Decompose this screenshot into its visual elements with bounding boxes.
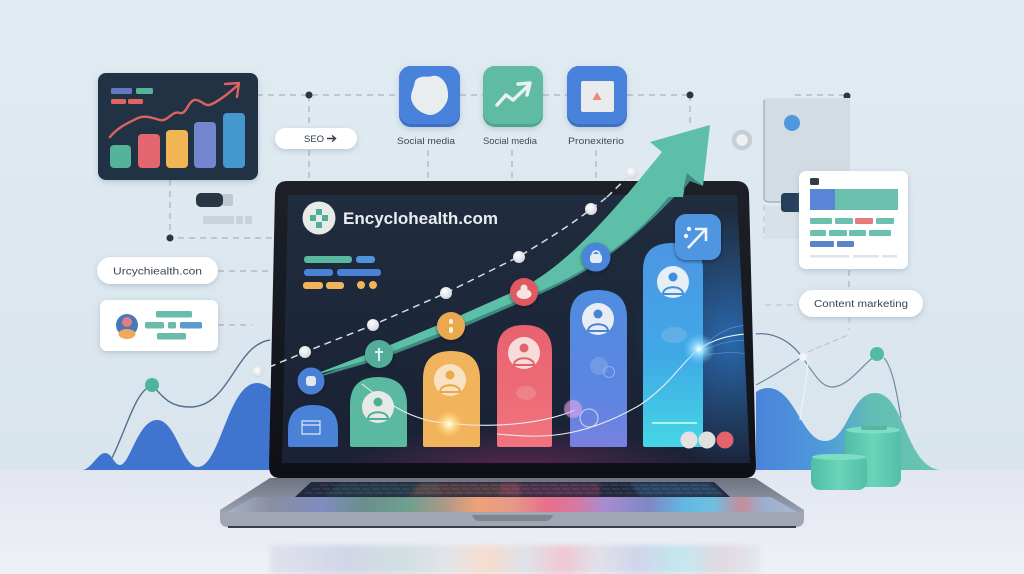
- white node: [799, 353, 807, 361]
- grey back panel: [764, 98, 850, 239]
- floor reflection: [270, 545, 760, 574]
- white data card: [799, 171, 908, 269]
- ring ornament: [734, 132, 750, 148]
- screen legend bars: [303, 256, 381, 289]
- bar: cyan: [643, 243, 703, 447]
- arrow overlap outside screen: [625, 125, 710, 197]
- label: social media 1: Social media: [397, 136, 456, 147]
- teal node: [870, 347, 884, 361]
- growth arrow: [321, 195, 674, 376]
- label: social media 2: Social media: [483, 136, 538, 147]
- laptop lid: [269, 181, 756, 478]
- content marketing pill: [799, 290, 923, 317]
- trend nodes: [299, 203, 597, 358]
- status dots: [680, 432, 734, 448]
- floor: [0, 470, 1024, 574]
- bar: orange: [423, 351, 480, 447]
- red trend arrow: [110, 83, 239, 137]
- bar: green: [350, 377, 407, 447]
- SEO pill: SEO: [304, 134, 324, 145]
- outer trend nodes: [252, 167, 638, 378]
- teal cylinders: [811, 426, 901, 490]
- label: third tile: Pronexiterio: [568, 136, 624, 147]
- arrow tile icon: [675, 214, 721, 260]
- mini bars: [110, 113, 245, 168]
- SEO pill: [275, 128, 357, 149]
- icon: green trend tile: [483, 66, 543, 127]
- profile card: [100, 300, 218, 351]
- sparkles: [435, 333, 715, 438]
- bar: violet blue: [570, 290, 627, 447]
- green node: [145, 378, 159, 392]
- dashed trend line: [284, 197, 607, 362]
- right mountain chart: [756, 334, 940, 470]
- mini legend: [111, 88, 153, 104]
- bar: red: [497, 325, 552, 447]
- toggle widget: [196, 193, 252, 224]
- laptop screen: [282, 195, 750, 463]
- flower icon: [116, 314, 138, 339]
- light strip: [225, 497, 799, 513]
- left mountain chart: [83, 340, 272, 470]
- connector lines: [170, 95, 849, 330]
- content marketing pill: Content marketing: [814, 298, 908, 310]
- URL pill: Urcychiealth.con: [113, 266, 202, 278]
- keyboard: [295, 482, 730, 497]
- bar: blue: [288, 405, 338, 447]
- screen brand logo: [302, 202, 336, 234]
- laptop base: [220, 478, 804, 528]
- icon: blue triangle tile: [567, 66, 627, 127]
- growth nodes: [298, 242, 610, 394]
- URL pill: [97, 257, 218, 284]
- screen brand name: Encyclohealth.com: [343, 209, 498, 228]
- white curves: [362, 334, 770, 436]
- connector dots: [166, 92, 850, 242]
- front lip: [220, 512, 804, 527]
- dashboard chart card: [98, 73, 258, 180]
- icon: blue social tile: [399, 66, 460, 127]
